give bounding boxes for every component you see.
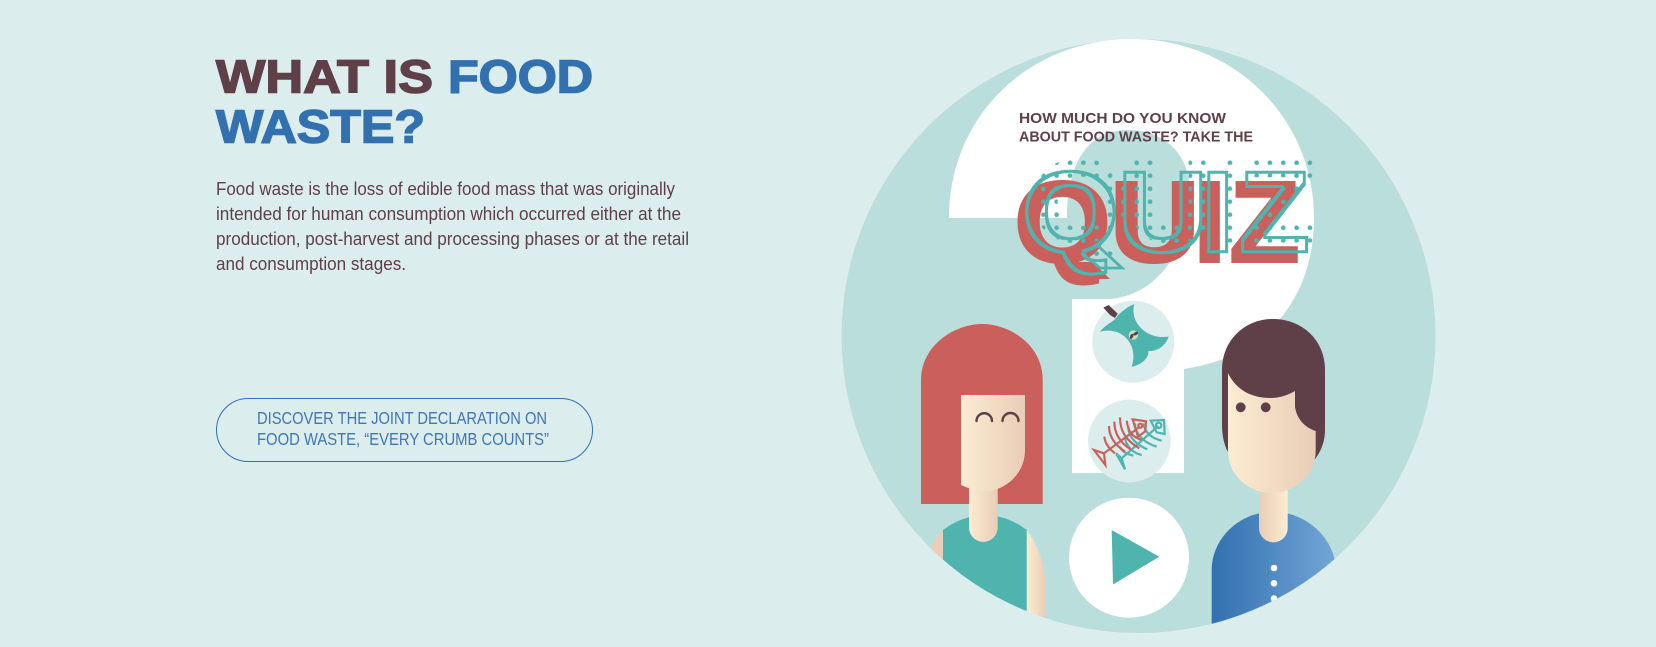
icon: apple core [1092,301,1174,383]
intro paragraph: Food waste is the loss of edible food mass that was originally [216,179,675,199]
heading: WASTE? [216,100,425,152]
shirt [1212,513,1334,624]
neck [969,488,998,542]
intro paragraph [216,179,689,274]
button: joint declaration: DISCOVER THE JOINT DECLARATION ON [257,408,547,428]
quiz wordmark [1015,138,1317,285]
heading [216,50,593,152]
heading: WHAT IS [216,50,433,102]
quiz wordmark: I [1214,138,1245,264]
quiz wordmark: I [1202,149,1233,275]
quiz wordmark: QU [1023,149,1207,275]
hair [921,324,1043,504]
icon: fish skeletons [1088,400,1171,482]
quiz wordmark: I [1194,159,1225,285]
quiz wordmark: Z [1240,149,1309,275]
character: woman [921,324,1046,640]
face [1228,373,1316,493]
quiz intro text: ABOUT FOOD WASTE? TAKE THE [1019,130,1253,146]
right arm [1026,530,1046,618]
button: joint declaration [216,398,592,462]
quiz intro text [1019,111,1253,146]
intro paragraph: and consumption stages. [216,254,406,274]
shirt buttons [1271,565,1277,602]
quiz wordmark: Z [1230,159,1299,285]
quiz wordmark: QU [1015,159,1199,285]
left arm [930,530,943,560]
button: joint declaration: FOOD WASTE, “EVERY CRUMB COUNTS” [257,429,549,449]
eyes [1236,402,1271,412]
quiz wordmark: Z [1248,138,1317,264]
top [943,516,1027,612]
quiz wordmark: QU [1032,138,1217,264]
character: man [1212,319,1336,640]
intro paragraph: production, post-harvest and processing phases or at the retail [216,229,689,249]
red fish skeleton [1094,417,1146,465]
face [961,395,1025,491]
hair [1222,319,1325,459]
heading: FOOD [448,50,593,102]
neck [1259,490,1288,542]
quiz illustration circle [842,39,1436,633]
intro paragraph: intended for human consumption which occurred either at the [216,204,681,224]
teal fish skeleton [1116,420,1165,469]
play button [1069,498,1189,618]
quiz intro text: HOW MUCH DO YOU KNOW [1019,111,1226,127]
eyes [976,413,1018,421]
question mark [949,39,1314,473]
